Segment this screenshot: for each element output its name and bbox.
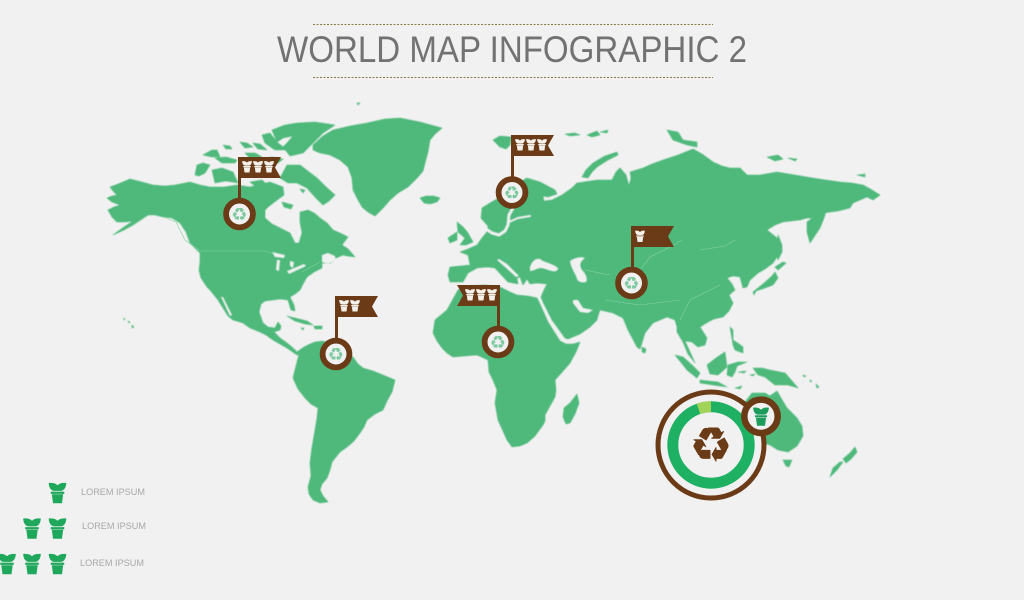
Australia (732, 391, 803, 452)
marker: South America: ♻ (328, 344, 344, 366)
New Zealand (830, 447, 857, 477)
Arctic Canada islands (195, 122, 335, 209)
Tasmania (783, 460, 792, 467)
small pot badge (744, 400, 778, 433)
marker: Africa (457, 285, 511, 355)
legend row 1: LOREM IPSUM (81, 487, 145, 498)
marker: Canada: ♻ (231, 204, 248, 226)
marker: Northern Europe (499, 135, 554, 206)
Caribbean islands (287, 316, 322, 330)
Novaya Zemlya (582, 152, 618, 178)
country borders (164, 217, 735, 320)
New Guinea (753, 368, 798, 388)
Sri Lanka (642, 347, 646, 353)
Kamchatka (807, 208, 827, 243)
legend row 1 (49, 483, 145, 503)
Iceland (420, 196, 440, 204)
big recycling donut (658, 392, 764, 498)
marker: South America (323, 296, 378, 367)
marker: Central Asia: ♻ (623, 274, 640, 294)
legend (0, 483, 146, 574)
marker: Northern Europe: ♻ (504, 183, 520, 204)
legend row 3 (0, 554, 144, 574)
legend row 3: LOREM IPSUM (80, 558, 144, 569)
legend row 2: LOREM IPSUM (82, 521, 146, 532)
North America (107, 179, 355, 355)
marker: Canada (226, 157, 281, 227)
South America (293, 341, 395, 503)
legend row 2 (23, 518, 146, 539)
seas and internal borders (221, 185, 593, 316)
British Isles (448, 222, 473, 245)
big recycling donut: ♻ (690, 418, 732, 473)
marker: Africa: ♻ (490, 332, 506, 354)
Indonesia and Philippines (675, 327, 755, 389)
Greenland (313, 118, 442, 216)
Africa (433, 285, 580, 447)
Hawaii and small Pacific dots (124, 103, 819, 388)
Eurasia (448, 149, 880, 363)
Svalbard and Franz Josef Land (493, 130, 608, 149)
title block: WORLD MAP INFOGRAPHIC 2 (277, 29, 747, 70)
Madagascar (563, 394, 579, 424)
world map (107, 103, 880, 503)
Japan and Sakhalin (753, 235, 786, 295)
Arctic Russia islands (667, 130, 865, 177)
marker: Central Asia (618, 226, 674, 296)
